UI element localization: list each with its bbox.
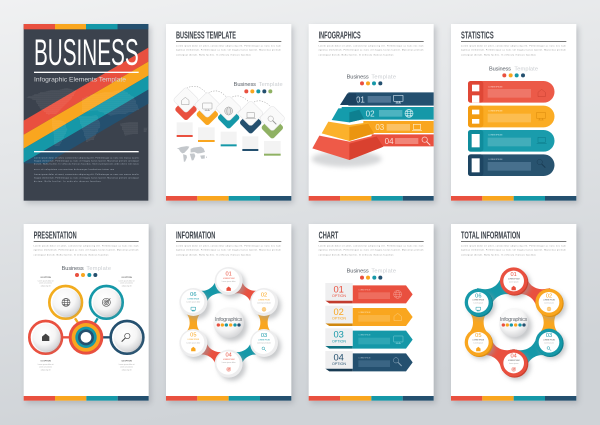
node 01: LOREM IPSUM [508,278,520,280]
node 02: LOREM IPSUM [258,299,270,301]
connectors [466,273,562,371]
centre disc [499,308,532,341]
node 02: Lorem ipsum dolor [257,302,271,304]
option 04: LOREM IPSUM [359,357,371,359]
cover body text: Lorem ipsum dolor sit amet, consectetur adipiscing elit. Pellentesque ac nunc nec massa iaculis [34,156,139,159]
node: target [90,286,123,319]
colour dots [360,81,382,85]
option 04: OPTION [332,362,346,366]
intro text: egestas elementum. Pellentesque ac nunc vel magna luctus laoreet. Maecenas pretium [34,249,139,252]
node 06: LOREM IPSUM [473,300,485,302]
cover body text: error sit voluptatem accusantium doloremque laudantium totam rem [34,168,114,171]
intro text: egestas elementum. Pellentesque ac nunc vel magna luctus laoreet. Maecenas pretium [319,249,424,252]
row 3 teal [468,130,554,152]
node 03: Lorem ipsum dolor [257,343,271,345]
node 04 [215,350,246,381]
subheading: Template [86,266,111,272]
chevron steps [173,87,286,139]
step 1 house [173,87,199,121]
node 01 [500,267,531,298]
intro text: Lorem ipsum dolor sit amet, consectetur adipiscing elit. Pellentesque ac nunc nec nam [319,44,424,47]
node 04: Lorem ipsum dolor [222,362,236,364]
band 02 [342,107,434,120]
band 03 [363,121,434,133]
cover body text: feugiat elementum. Pellentesque ac nunc vel magna luctus laoreet. Maecenas pretium consequat [34,159,139,162]
diagonal stripes [24,48,148,163]
panel: business cover [24,24,151,203]
colour dots [244,89,272,93]
heading: STATISTICS [461,30,494,41]
node 05: LOREM IPSUM [473,339,485,341]
option 04 [325,351,413,371]
heading: CHART [319,230,338,241]
cover body text [34,151,139,183]
option label top right: 03 OPTION [121,277,132,279]
option 01: LOREM IPSUM [359,289,371,291]
node 06: Lorem ipsum dolor [186,302,201,304]
intro text: Lorem ipsum dolor sit amet, consectetur adipiscing elit. Pellentesque ac nunc nec nam [319,244,424,247]
subheading: Business [347,74,369,80]
panel: information [166,224,293,403]
centre disc [213,307,247,341]
intro text: Lorem ipsum dolor sit amet, consectetur adipiscing elit. Pellentesque ac nunc nec nam [176,244,281,247]
node 02: 02 [546,293,552,299]
node 06: 06 [475,293,481,299]
intro text [176,244,281,256]
panel: statistics [451,24,578,203]
cover colour bar [24,24,148,29]
option 01: OPTION [332,294,346,298]
step 3 globe [215,95,242,129]
option label bottom left: 01 OPTION [40,361,51,363]
row 1 red [468,81,554,103]
node 01: Lorem ipsum [509,281,519,283]
step 4 laptop [237,100,264,134]
row 1 red: LOREM IPSUM [488,86,503,88]
intro text: consequat dictum. Nulla facilisi. In vehicula rhoncus faucibus [319,53,393,56]
pyramid [312,93,383,160]
intro text: consequat dictum. Nulla facilisi. In vehicula rhoncus faucibus [176,253,251,256]
node 02: Lorem ipsum [544,303,554,305]
option 03: OPTION [332,339,346,343]
node 05 [179,329,210,360]
dashed connectors [187,86,272,108]
cover body text: Lorem ipsum dolor sit amet, consectetur adipiscing elit. Pellentesque ac nunc nec massa iaculis [34,173,139,176]
subheading [62,266,111,272]
pyramid shadow [312,151,382,167]
option 04: 04 [333,352,344,362]
step 5 magnifier [259,105,286,139]
subheading: Business [347,268,369,274]
option label top left: adipiscing elit [41,284,51,287]
node 01: 01 [511,272,517,278]
band 04 [372,134,434,146]
node 03 [250,329,281,360]
intro text: consequat dictum. Nulla facilisi. In vehicula rhoncus faucibus [176,53,251,56]
node: house [29,321,62,354]
node 03: LOREM IPSUM [543,339,555,341]
subheading: Template [514,66,538,72]
option label top right [119,277,135,287]
cover body text: dictum. Nulla facilisi. In vehicula rhoncus faucibus. Sed ut perspiciatis unde omnis iste natus [34,162,139,165]
step text boxes [177,122,281,156]
intro text: Lorem ipsum dolor sit amet, consectetur adipiscing elit. Pellentesque ac nunc nec nam [461,44,566,47]
subheading: Template [371,74,396,80]
small world map [177,146,207,162]
heading: BUSINESS TEMPLATE [176,30,236,41]
centre disc: Infographics [500,317,528,323]
row 2 orange: LOREM IPSUM [488,111,503,113]
footer bar [451,396,576,401]
node 04: LOREM IPSUM [508,360,520,362]
intro text: egestas elementum. Pellentesque ac nunc vel magna luctus laoreet. Maecenas pretium [461,49,566,52]
node 03: 03 [261,333,267,339]
node 06 [179,288,210,319]
node 05: Lorem ipsum dolor [186,342,201,344]
band 01 [348,92,434,106]
node 03: LOREM IPSUM [258,339,270,341]
option 01 [325,283,413,303]
node 03 [535,329,566,359]
intro text: Lorem ipsum dolor sit amet, consectetur adipiscing elit. Pellentesque ac nunc nec nam [176,44,281,47]
option label bottom left [38,361,54,371]
band 01: 01 [356,96,365,105]
option 02: 02 [333,307,344,317]
row 4 navy [468,154,554,176]
node 06 [465,289,495,319]
heading: TOTAL INFORMATION [461,230,520,241]
option label bottom left: Lorem ipsum dolor sit [38,363,54,366]
option label bottom right: 04 OPTION [121,360,132,363]
cover subtitle: Infographic Elements Template [34,77,126,84]
option label bottom left: amet consectetur [39,366,52,369]
connectors [62,318,112,337]
subheading: Template [259,82,283,88]
intro text: consequat dictum. Nulla facilisi. In vehicula rhoncus faucibus [461,253,536,256]
node 04: LOREM IPSUM [223,359,235,361]
footer bar [166,396,291,401]
intro text [319,244,424,256]
footer bar [451,196,576,201]
intro text: egestas elementum. Pellentesque ac nunc vel magna luctus laoreet. Maecenas pretium [176,249,281,252]
heading: PRESENTATION [34,230,77,241]
heading: INFORMATION [176,230,215,241]
node: globe [49,286,82,319]
option label top left: Lorem ipsum dolor sit [38,279,54,282]
option 01: 01 [333,284,344,294]
intro text [461,244,566,256]
intro text: consequat dictum. Nulla facilisi. In vehicula rhoncus faucibus [34,253,108,256]
node 01: LOREM IPSUM [223,278,235,280]
panel: total information [451,224,578,403]
option 02 [325,306,413,326]
option label top right: adipiscing elit [122,284,132,287]
intro text: consequat dictum. Nulla facilisi. In vehicula rhoncus faucibus [319,253,393,256]
intro text: egestas elementum. Pellentesque ac nunc vel magna luctus laoreet. Maecenas pretium [319,49,424,52]
node 05: 05 [190,332,196,338]
subheading [347,74,396,80]
panel: presentation [24,224,151,403]
row 4 navy: LOREM IPSUM [488,159,503,161]
footer bar [166,196,291,201]
node: magnifier [111,321,143,354]
row 2 orange [468,106,554,127]
option 02: OPTION [332,317,346,321]
option label bottom left: adipiscing elit [41,368,51,371]
subheading [347,268,396,274]
panel: business template [166,24,293,203]
colour dots [502,73,525,77]
subheading: Template [371,268,396,274]
band 03: 03 [375,123,385,132]
node 04: 04 [511,354,517,360]
node 05: LOREM IPSUM [188,339,200,341]
option label bottom right [119,360,135,371]
intro text: egestas elementum. Pellentesque ac nunc vel magna luctus laoreet. Maecenas pretium [461,249,566,252]
option label bottom right: Lorem ipsum dolor sit [119,363,135,366]
connectors [181,274,276,371]
node 01: 01 [226,272,232,278]
option label top right: Lorem ipsum dolor sit [119,279,135,282]
option label top right: amet consectetur [120,282,133,285]
intro text: egestas elementum. Pellentesque ac nunc vel magna luctus laoreet. Maecenas pretium [176,49,281,52]
node 04: 04 [226,353,232,359]
subheading [489,66,538,72]
band 04: 04 [385,137,394,146]
node 02: LOREM IPSUM [543,300,555,302]
node 01 [215,267,246,298]
node 02 [535,289,566,319]
intro text [319,44,424,56]
footer bar [24,396,149,401]
heading: INFOGRAPHICS [319,30,361,41]
footer bar [309,196,434,201]
node 03: 03 [546,333,552,339]
intro text: Lorem ipsum dolor sit amet, consectetur adipiscing elit. Pellentesque ac nunc nec nam [461,244,566,247]
step 2 monitor [194,92,221,126]
option label top left [38,277,54,287]
option label top left: 02 OPTION [40,277,51,279]
dotted world map [27,88,147,147]
panel: infographics pyramid [309,24,436,203]
subheading [234,82,283,88]
cover title: BUSINESS [34,32,139,73]
node 01: Lorem ipsum dolor [222,281,236,283]
node 04 [500,349,531,380]
panel: chart [309,224,436,403]
intro text [461,44,566,56]
node 06: Lorem ipsum [474,303,484,305]
intro text: consequat dictum. Nulla facilisi. In vehicula rhoncus faucibus [461,53,536,56]
intro text [34,244,139,256]
node 03: Lorem ipsum [544,342,554,344]
central target [69,320,103,355]
footer bar [309,396,434,401]
cover body text: feugiat elementum. Pellentesque ac nunc vel magna luctus laoreet. Maecenas pretium consequat [34,176,139,179]
option 03 [325,328,413,349]
option label top left: amet consectetur [39,282,52,285]
node 02: 02 [261,293,267,299]
option label bottom right: adipiscing elit [122,368,132,371]
node 05 [465,329,495,359]
node 05: Lorem ipsum [474,342,484,344]
node 02 [250,288,281,319]
colour dots [75,273,97,277]
cover body text: dictum. Nulla facilisi. In vehicula rhoncus faucibus [34,180,101,183]
node 05: 05 [475,333,481,339]
subheading: Business [489,66,511,72]
intro text: Lorem ipsum dolor sit amet, consectetur adipiscing elit. Pellentesque ac nunc nec nam [34,244,139,247]
cover subtitle [34,72,139,84]
band 02: 02 [366,109,375,118]
colour dots [360,276,382,280]
subheading: Business [234,82,256,88]
intro text [176,44,281,56]
option label bottom right: amet consectetur [120,366,133,369]
option 03: 03 [333,330,344,340]
node 06: 06 [190,292,196,298]
node 06: LOREM IPSUM [188,298,200,300]
subheading: Business [62,266,84,272]
option 02: LOREM IPSUM [359,312,371,314]
row 3 teal: LOREM IPSUM [488,135,503,137]
centre disc: Infographics [215,317,243,323]
option 03: LOREM IPSUM [359,335,371,337]
node 04: Lorem ipsum [509,363,519,365]
